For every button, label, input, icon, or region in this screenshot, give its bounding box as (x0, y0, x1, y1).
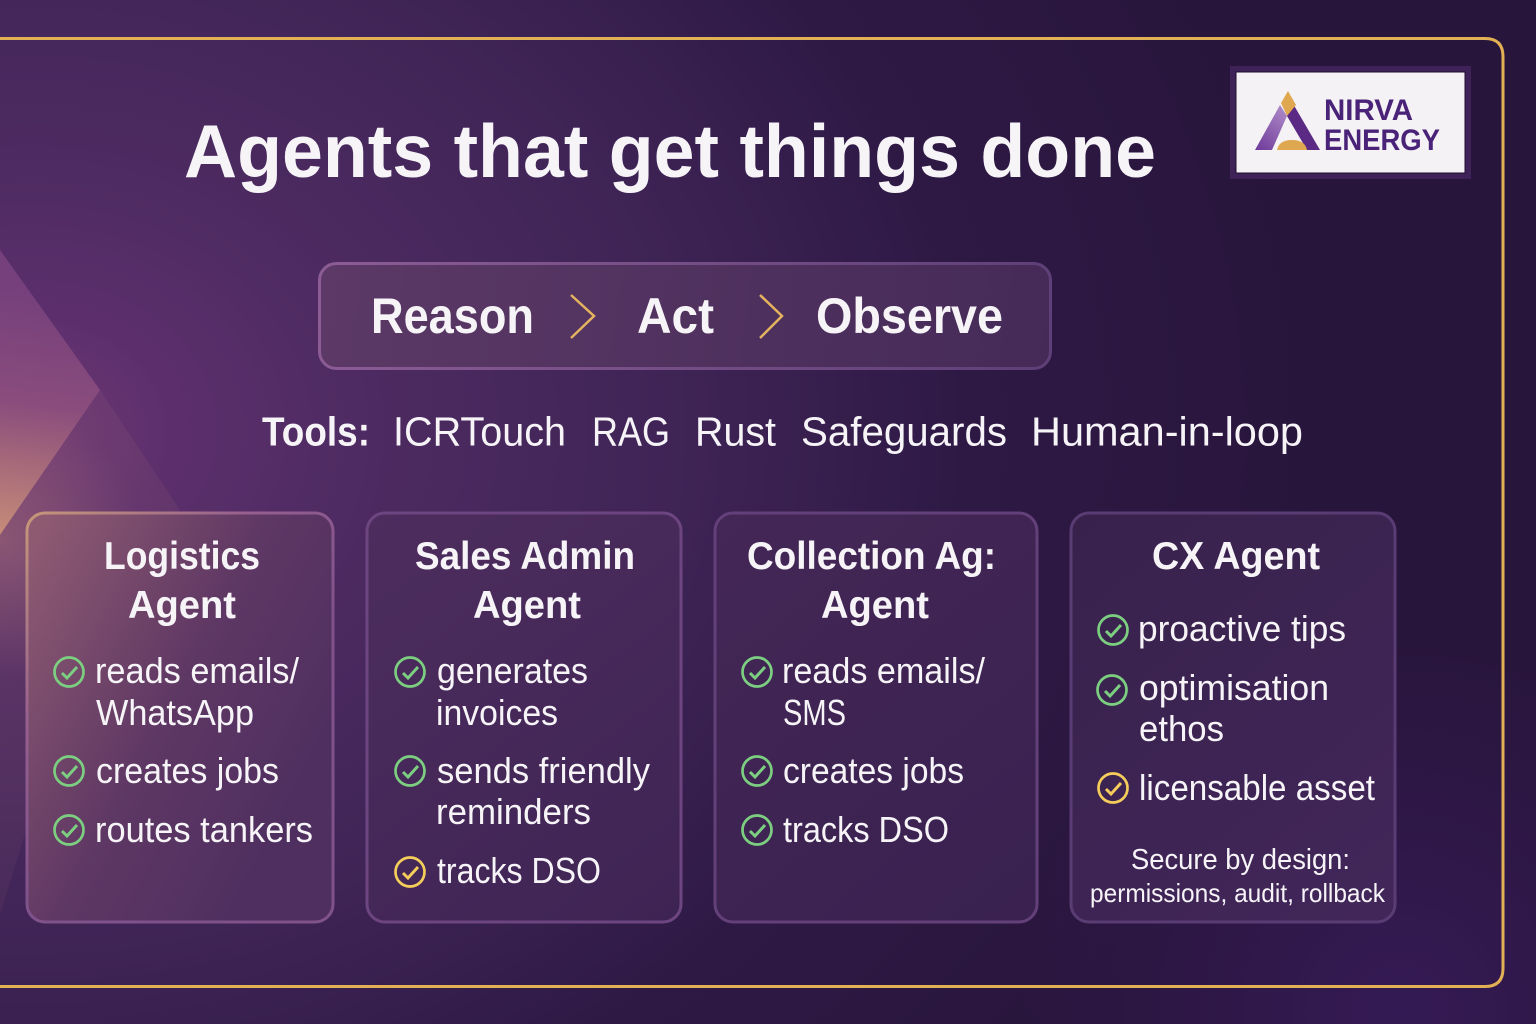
icon: yellow check (396, 858, 424, 886)
tools row: Tools: (262, 408, 370, 454)
icon: green check (1098, 616, 1128, 644)
tools row (262, 408, 1303, 454)
logo text (1324, 94, 1440, 157)
panel: Collection Agent: tracks DSO (783, 809, 949, 850)
panel: Logistics Agent: routes tankers (95, 809, 313, 850)
tools row: Human-in-loop (1031, 408, 1303, 454)
panel: CX Agent: ethos (1139, 708, 1224, 749)
panel: CX Agent: optimisation (1139, 667, 1329, 708)
panel: Logistics Agent: WhatsApp (96, 692, 254, 733)
panel: Sales Admin Agent: Sales Admin (415, 535, 635, 578)
icon: green check (742, 816, 772, 844)
panel: Sales Admin Agent: Agent (473, 584, 581, 627)
process pill: Reason Act Observe (320, 264, 1050, 368)
icon: yellow check (1098, 774, 1128, 802)
panel: CX Agent (1071, 513, 1395, 922)
arrow: reason to act (571, 295, 594, 338)
panel: Logistics Agent: Logistics (104, 535, 260, 578)
process pill: Reason Act Observe: Observe (816, 288, 1003, 344)
icon: green check (54, 658, 84, 686)
icon: green check (54, 816, 84, 844)
icon: green check (1098, 676, 1126, 704)
panel: Logistics Agent (27, 513, 333, 922)
panel: Logistics Agent: creates jobs (96, 750, 279, 791)
icon: green check (54, 756, 84, 786)
tools row: Rust (695, 408, 777, 454)
panel: Sales Admin Agent: sends friendly (437, 750, 650, 791)
panel: Sales Admin Agent: tracks DSO (437, 850, 601, 891)
logo text: ENERGY (1324, 124, 1440, 157)
arrow: act to observe (760, 295, 782, 338)
panel: Collection Agent: reads emails/ (782, 650, 985, 691)
panel: CX Agent: proactive tips (1138, 608, 1346, 649)
panel: Collection Agent: creates jobs (783, 750, 964, 791)
process pill: Reason Act Observe: Act (637, 288, 714, 344)
icon: logo triangle (1255, 91, 1320, 150)
title: Agents that get things done (184, 109, 1156, 193)
security note: permissions, audit, rollback (1090, 878, 1386, 908)
icon: green check (742, 756, 772, 786)
security note (1090, 844, 1386, 908)
icon: green check (742, 658, 772, 686)
panel: Collection Agent: SMS (783, 692, 846, 733)
panel: CX Agent: CX Agent (1152, 535, 1320, 578)
logo text: NIRVA (1324, 94, 1413, 127)
panel: Collection Agent: Agent (821, 584, 929, 627)
tools row: RAG (592, 408, 670, 454)
process pill: Reason Act Observe: Reason (371, 288, 534, 344)
tools row: ICRTouch (393, 408, 566, 454)
logo: Nirva Energy (1230, 66, 1471, 179)
panel: Sales Admin Agent: generates (437, 650, 588, 691)
icon: green check (396, 756, 424, 786)
panel: Sales Admin Agent (367, 513, 681, 922)
tools row: Safeguards (801, 408, 1007, 454)
security note: Secure by design: (1131, 844, 1350, 876)
panel: Collection Agent: Collection Ag: (747, 535, 996, 578)
panel: Sales Admin Agent: reminders (436, 791, 591, 832)
panel: Sales Admin Agent: invoices (436, 692, 558, 733)
panel: Collection Agent (715, 513, 1037, 922)
panel: CX Agent: licensable asset (1139, 767, 1375, 808)
panel: Logistics Agent: reads emails/ (95, 650, 299, 691)
icon: green check (396, 658, 424, 686)
panel: Logistics Agent: Agent (128, 584, 236, 627)
